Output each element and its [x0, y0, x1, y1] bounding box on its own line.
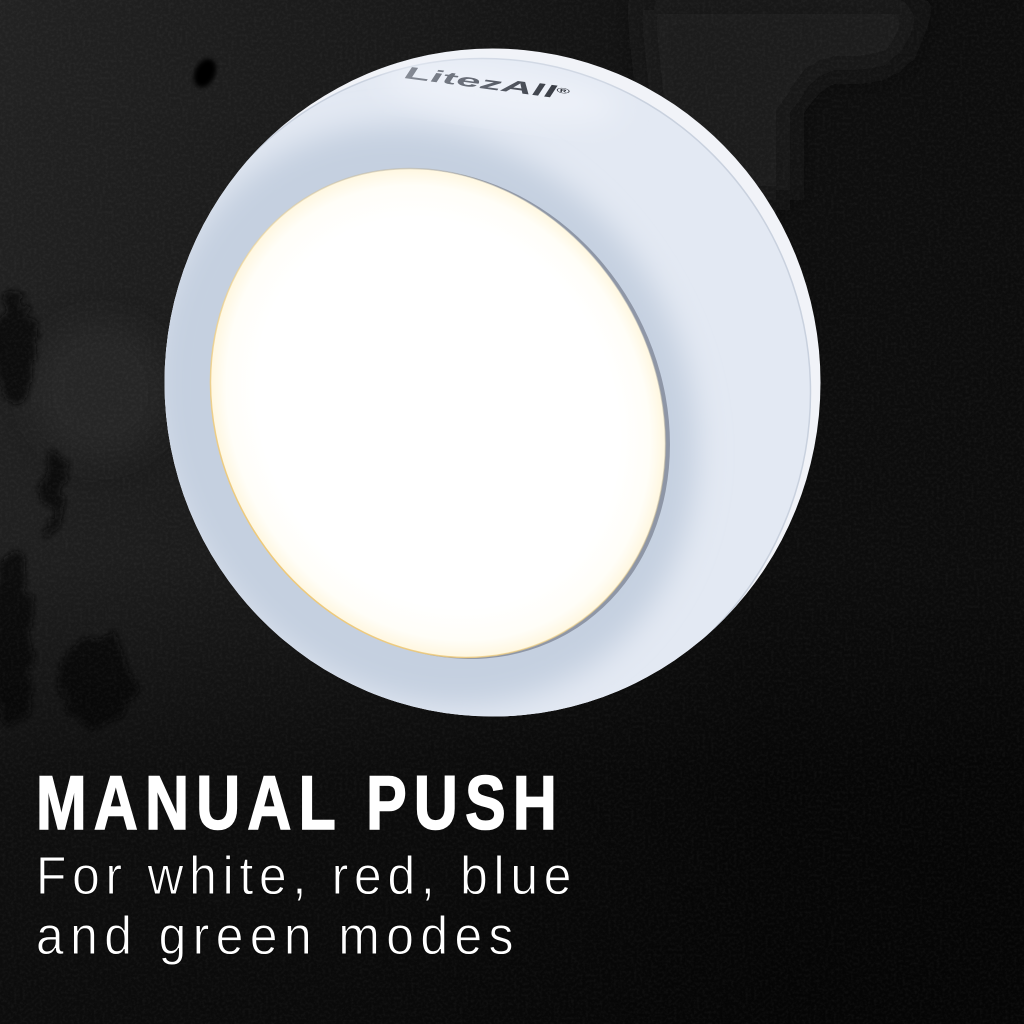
brand logo: ®	[556, 86, 572, 96]
glowing lens	[123, 85, 753, 741]
housing face	[164, 50, 812, 716]
description text: and green modes	[36, 905, 513, 965]
heading: manual push: MANUAL PUSH	[36, 761, 557, 846]
description text: For white, red, blue	[36, 845, 571, 905]
description text	[36, 845, 571, 965]
outer white rim	[164, 48, 820, 716]
product: round push light	[164, 48, 820, 716]
chrome bezel	[126, 85, 758, 743]
brand logo: LitezAll	[403, 64, 480, 92]
